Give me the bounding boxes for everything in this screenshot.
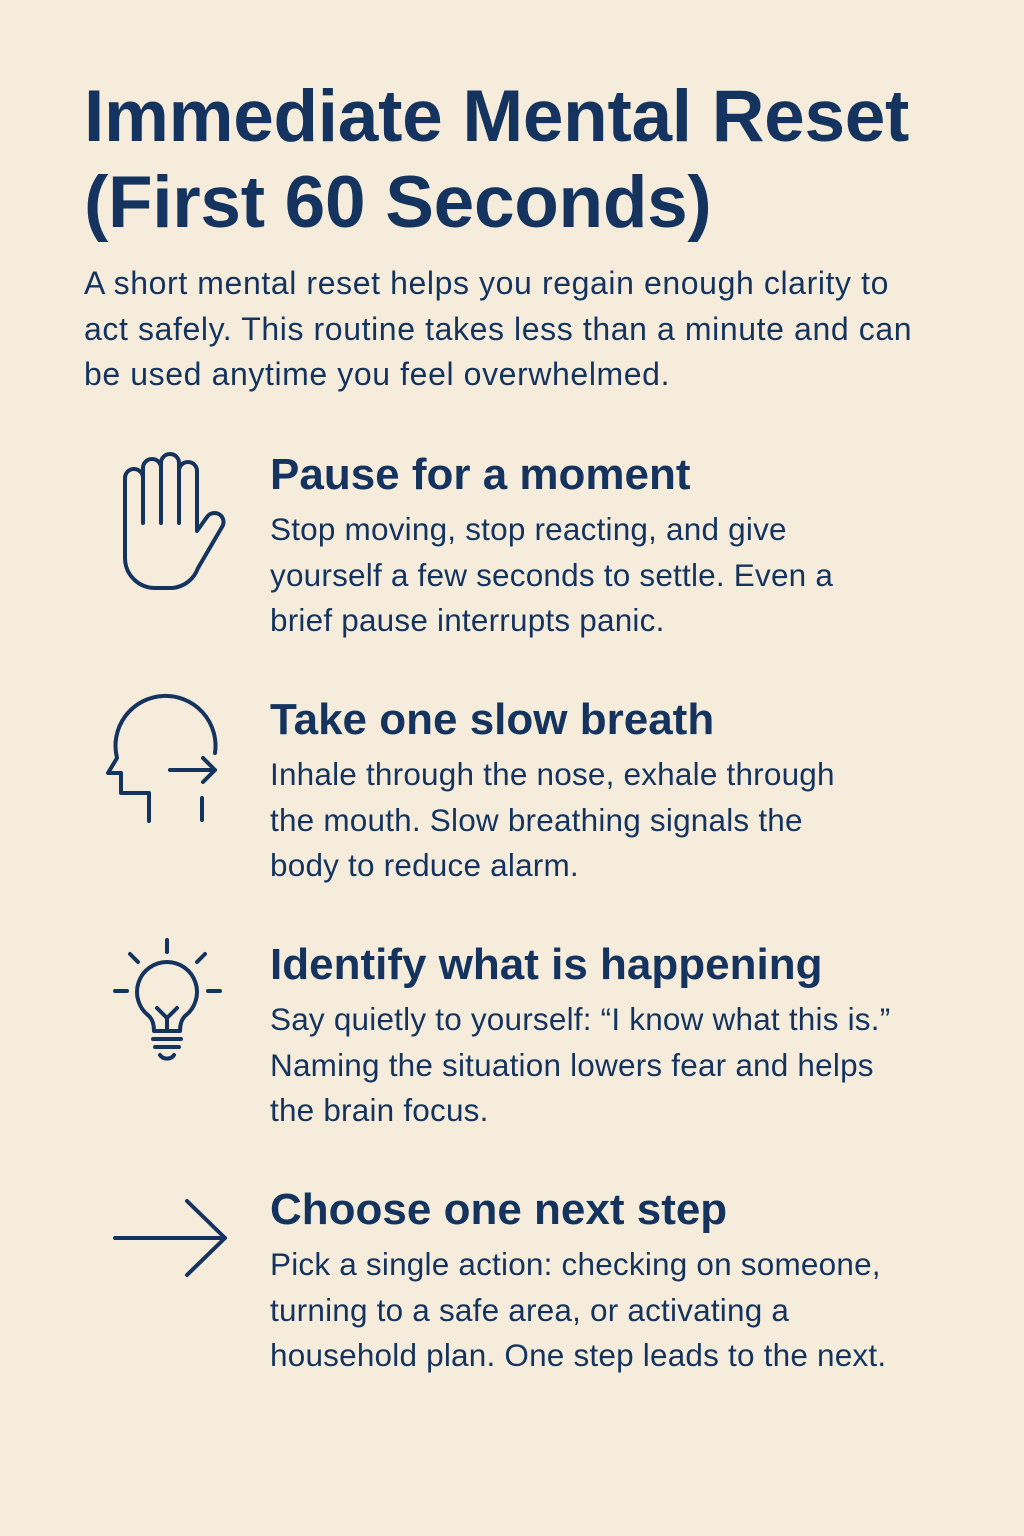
icon: lightbulb	[113, 938, 222, 1061]
intro text: be used anytime you feel overwhelmed.	[84, 356, 670, 392]
section: breath: Inhale through the nose, exhale through	[270, 756, 835, 792]
section: next step: Pick a single action: checking on someone,	[270, 1246, 881, 1282]
title: (First 60 Seconds)	[84, 162, 711, 243]
intro text: act safely. This routine takes less than a minute and can	[84, 310, 912, 346]
intro text	[84, 265, 912, 392]
section: pause	[270, 450, 833, 638]
section: identify	[270, 940, 890, 1128]
title: Immediate Mental Reset	[84, 76, 909, 157]
section: pause: Stop moving, stop reacting, and give	[270, 511, 787, 547]
icon: head breath	[106, 694, 218, 823]
section: identify: Say quietly to yourself: “I know what this is.”	[270, 1001, 890, 1037]
section: breath	[270, 695, 835, 883]
icon: arrow	[113, 1198, 228, 1278]
section: next step: household plan. One step leads to the next.	[270, 1337, 886, 1373]
section: pause: brief pause interrupts panic.	[270, 602, 665, 638]
intro text: A short mental reset helps you regain enough clarity to	[84, 265, 889, 301]
section: pause: yourself a few seconds to settle. Even a	[270, 556, 833, 592]
section: breath: the mouth. Slow breathing signals the	[270, 802, 803, 838]
title	[84, 76, 909, 243]
section: identify: the brain focus.	[270, 1092, 489, 1128]
section: breath: body to reduce alarm.	[270, 847, 579, 883]
section: next step	[270, 1185, 886, 1373]
icon: hand	[123, 452, 226, 590]
section: identify: Identify what is happening	[270, 940, 822, 989]
section: next step: turning to a safe area, or activating a	[270, 1292, 789, 1328]
section: identify: Naming the situation lowers fear and helps	[270, 1046, 874, 1082]
section: pause: Pause for a moment	[270, 450, 691, 499]
section: breath: Take one slow breath	[270, 695, 714, 744]
section: next step: Choose one next step	[270, 1185, 727, 1234]
